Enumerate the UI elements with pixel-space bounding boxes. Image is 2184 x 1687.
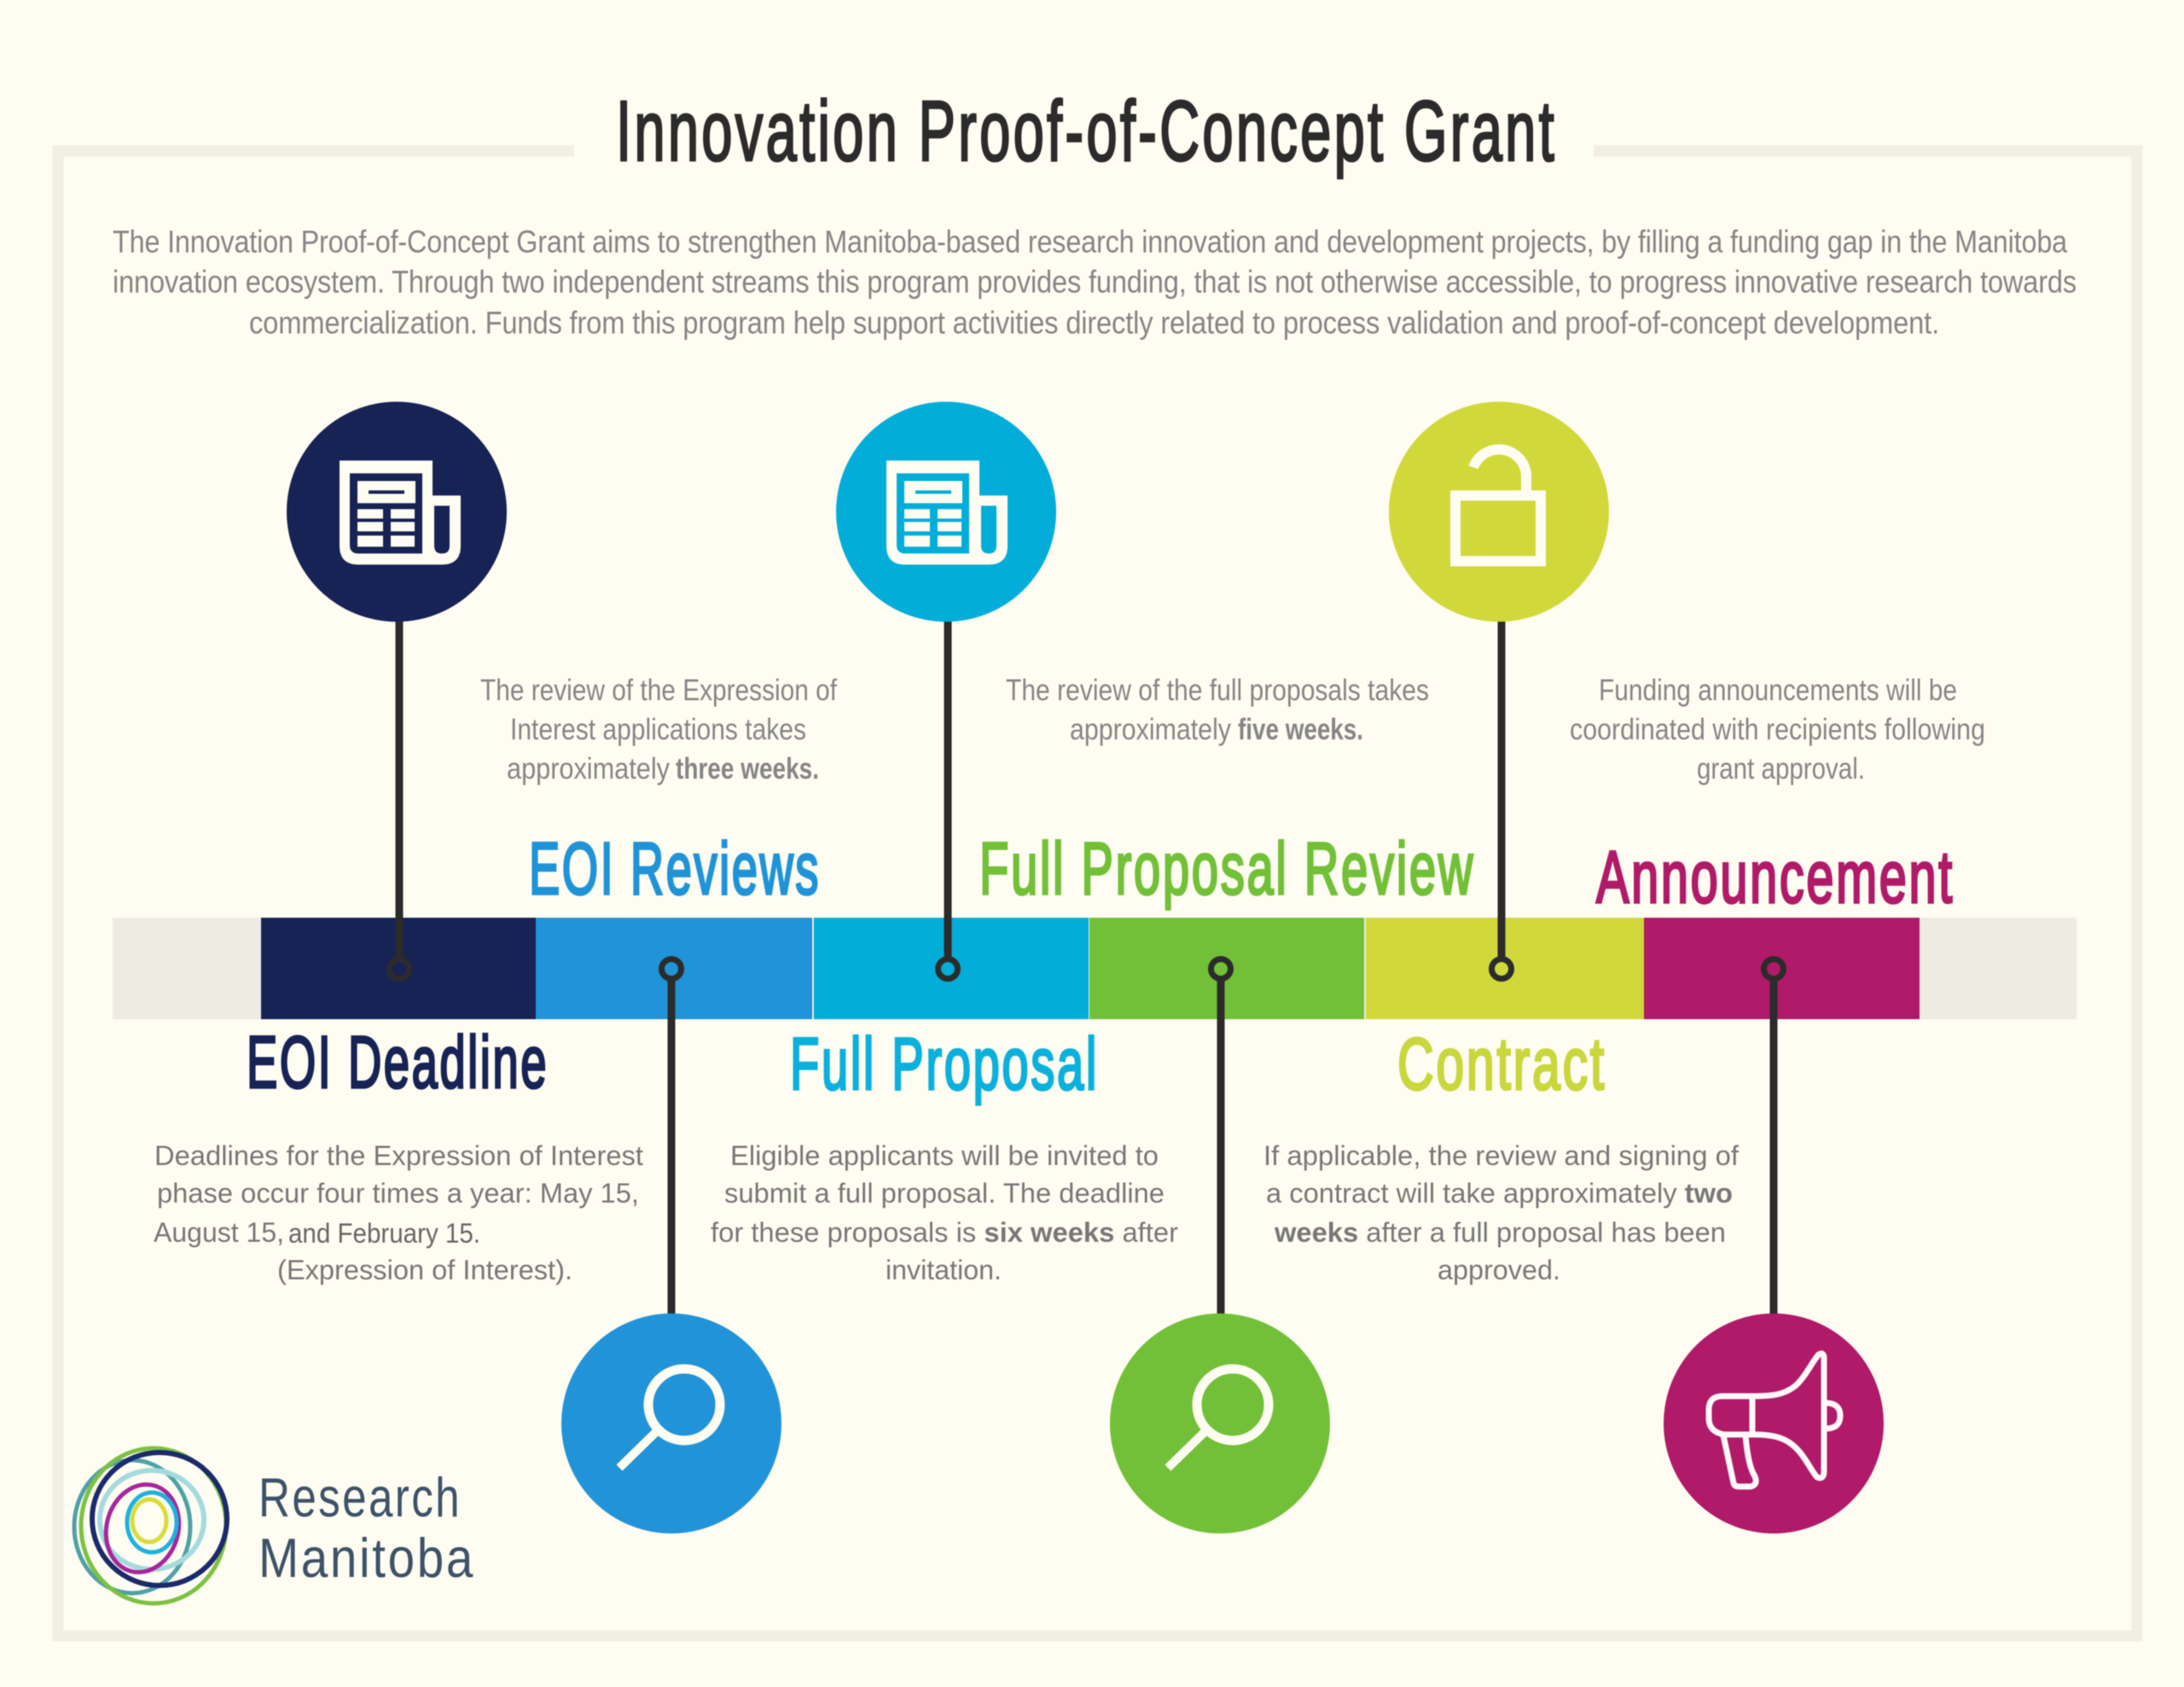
timeline bar [113,918,2077,1019]
icon: newspaper cyan [836,402,1056,622]
icon: open padlock [1389,402,1609,622]
label: Contract: Contract [1397,1023,1606,1105]
text: EOI review description: three weeks. [676,752,819,786]
text: contract description: weeks after a full proposal has been [1274,1217,1726,1248]
segment: EOI reviews [536,918,812,1019]
text: EOI deadline description: phase occur four times a year: May 15, [157,1178,639,1209]
text: full proposal review description: approximately [1070,713,1231,746]
text: EOI review description [480,674,837,786]
icon: megaphone [1664,1313,1884,1533]
intro paragraph [113,224,2077,340]
segment: contract [1366,918,1644,1019]
text: full proposal review description: five weeks. [1238,713,1363,746]
text: contract description [1263,1140,1739,1285]
text: announcement description: grant approval. [1697,752,1865,786]
icon: newspaper navy [287,402,507,622]
segment: full proposal [814,918,1089,1019]
text: announcement description [1570,674,1985,786]
text: EOI deadline description: and February 15. [288,1218,480,1249]
text: full proposal description: invitation. [886,1255,1002,1285]
text: EOI deadline description: August 15, [154,1217,284,1248]
segment: announcement [1644,918,1920,1019]
text: full proposal review description: The review of the full proposals takes [1006,674,1429,707]
label: Full Proposal Review: Full Proposal Review [979,828,1475,910]
segment: full proposal review [1089,918,1364,1019]
label: EOI Reviews: EOI Reviews [529,828,821,910]
text: full proposal description: Eligible applicants will be invited to [730,1140,1159,1171]
icon: magnifier green [1110,1313,1330,1533]
segment: EOI deadline [261,918,536,1019]
label: EOI Deadline: EOI Deadline [247,1022,549,1104]
text: full proposal description: submit a full proposal. The deadline [724,1178,1165,1209]
icon: magnifier blue [561,1313,781,1533]
text: EOI review description: approximately [507,752,670,786]
text: announcement description: Funding announcements will be [1599,674,1957,707]
label: Announcement: Announcement [1596,837,1955,919]
logo: Research Manitoba [74,1448,475,1603]
title: Innovation Proof-of-Concept Grant [616,84,1557,179]
text: full proposal description [711,1140,1178,1285]
text: EOI review description: Interest applications takes [510,713,806,746]
text: contract description: If applicable, the review and signing of [1263,1140,1739,1171]
text: full proposal review description [1006,674,1429,746]
text: full proposal description: for these proposals is six weeks after [711,1217,1178,1248]
connector lines and dots [389,621,1783,1318]
text: EOI deadline description: Deadlines for the Expression of Interest [154,1140,643,1171]
text: EOI review description: The review of the Expression of [480,674,837,707]
logo wordmark: Research [258,1466,462,1528]
text: announcement description: coordinated with recipients following [1570,713,1985,746]
label: Full Proposal: Full Proposal [790,1023,1099,1105]
logo rings [74,1448,227,1603]
logo wordmark [258,1466,475,1589]
text: EOI deadline description: (Expression of Interest). [277,1255,572,1285]
text: contract description: approved. [1438,1255,1560,1285]
text: EOI deadline description [154,1140,643,1285]
intro paragraph: commercialization. Funds from this program help support activities directly related to process validation and proof-of-concept development. [249,305,1939,340]
logo wordmark: Manitoba [258,1527,475,1589]
text: contract description: a contract will take approximately two [1266,1178,1733,1209]
